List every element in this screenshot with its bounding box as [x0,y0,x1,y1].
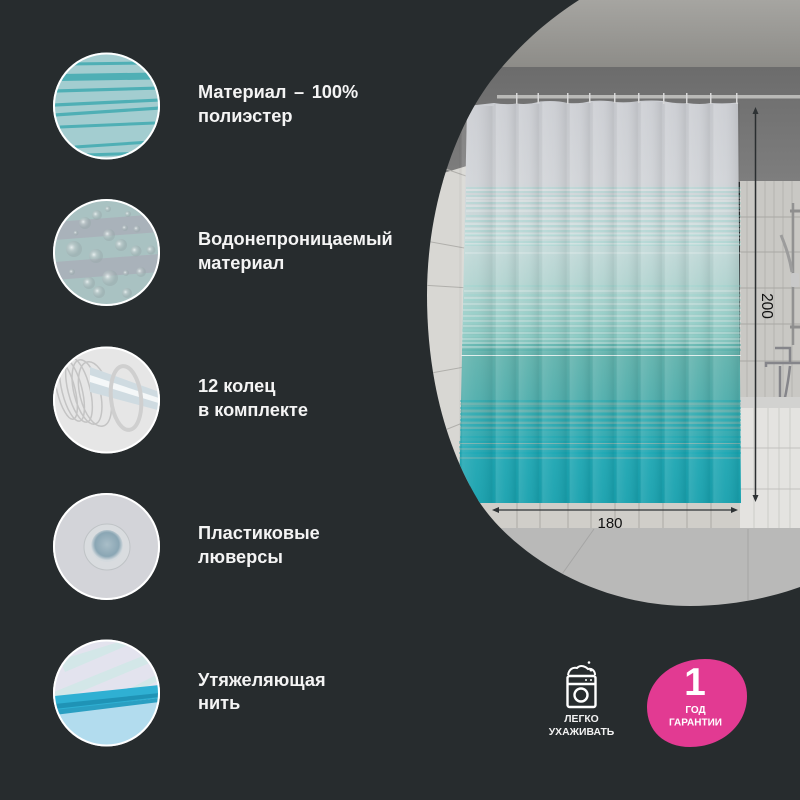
feature 3: rings swatch [50,346,165,454]
feature 5 text: Утяжеляющая [198,670,326,690]
easy care label: ЛЕГКО [564,714,599,725]
warranty badge: 1 [684,661,706,704]
warranty badge [647,659,747,747]
width label: 180 [597,515,623,532]
ceiling [502,0,800,67]
feature 2 text: Водонепроницаемый [198,229,393,249]
feature 5 text: нить [198,693,240,713]
height dimension arrow [752,107,758,502]
bathroom photo panel [420,0,800,618]
height label: 200 [758,293,775,319]
floor [500,528,800,606]
feature 3 text: в комплекте [198,400,308,420]
feature 3 text: 12 колец [198,376,276,396]
upper stripes [462,188,741,336]
easy care label: УХАЖИВАТЬ [549,727,615,738]
left tiled wall [427,166,470,486]
curtain rings [516,93,738,104]
feature 2 text: материал [198,253,284,273]
shower fittings [766,203,800,407]
bathtub [740,397,800,528]
upper wall [420,67,800,182]
feature 1: material swatch [53,52,160,160]
feature 1 text: полиэстер [198,106,292,126]
feature 4 text: Пластиковые [198,523,320,543]
icon: washing machine [568,661,596,707]
feature 4: grommet swatch [53,493,160,600]
curtain [459,100,741,503]
feature 4 text: люверсы [198,547,283,567]
feature 1 text: Материал – 100% [198,82,358,102]
tub front under curtain [478,500,740,528]
feature 5: weighted thread swatch [53,640,160,746]
right tiled wall [740,181,800,401]
curtain rod [497,95,800,98]
warranty badge: ГОД [685,705,706,716]
width dimension arrow [492,507,738,513]
folds [459,102,740,503]
lower stripes [459,401,741,453]
warranty badge: ГАРАНТИИ [669,718,722,728]
feature 2: water drops swatch [53,199,160,306]
